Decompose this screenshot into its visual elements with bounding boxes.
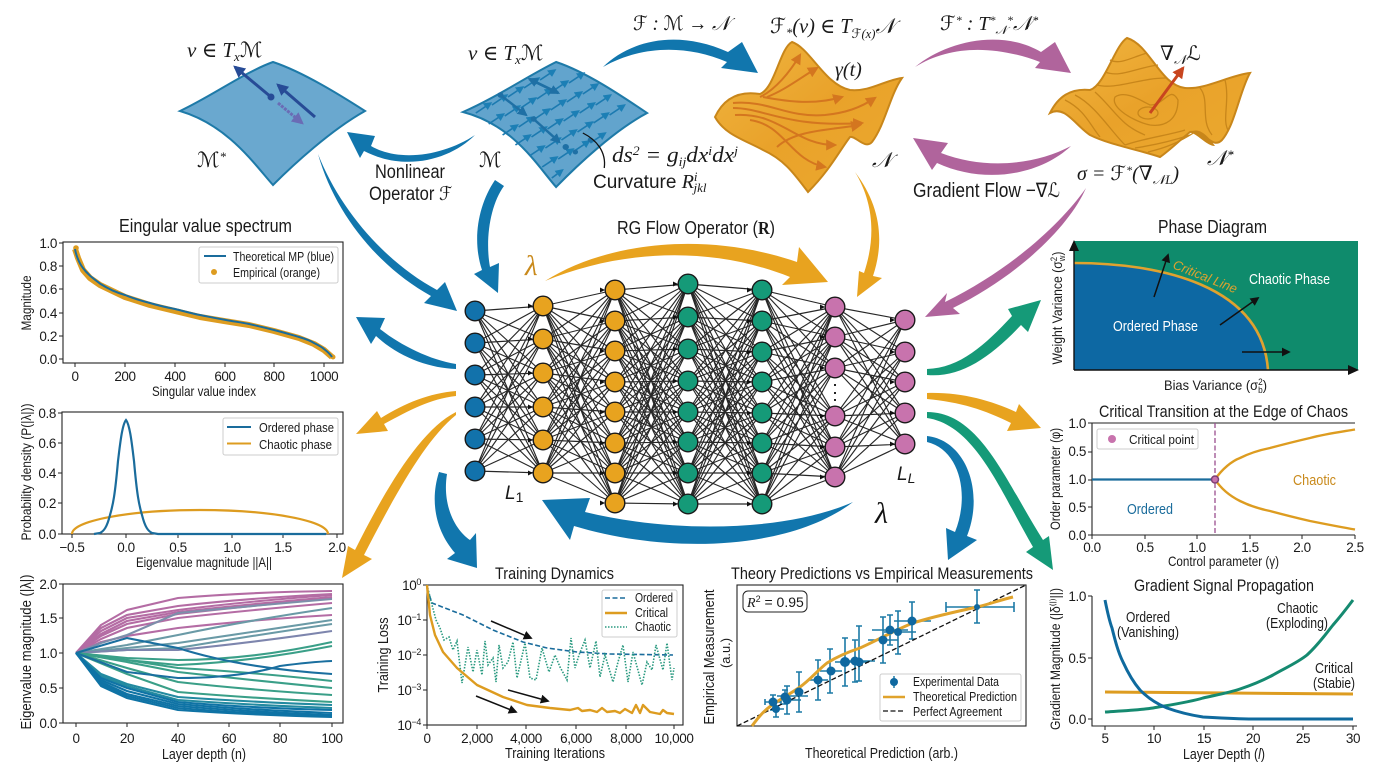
chart: eigenvalue density: 1.0 [223,540,241,555]
ordered curve [1105,600,1353,719]
theoretical series [75,249,332,357]
legend: Ordered [635,591,673,605]
formula: metric: 2 [633,143,640,158]
chart: eigenvalue flow by layer depth: 2.0 [39,577,57,592]
label: F* map: : [962,13,978,35]
label: F* map: * [1007,13,1013,27]
chart: critical transition: 1.0 [1068,416,1086,431]
arrow: M to network [474,180,504,293]
chart: gradient signal propagation: 5 [1101,731,1109,746]
chart: singular value spectrum [18,216,343,399]
annotation: chaotic exploding: Chaotic [1277,600,1318,617]
chart: eigenvalue density: 0.0 [38,527,56,542]
label: L1: L [505,483,516,504]
x axis label: Training Iterations [505,745,605,762]
arrow: RG flow [545,244,828,285]
x axis label: 2 [1258,377,1263,387]
hidden layers gold nodes [533,280,625,513]
arrow: network to spectrum [356,317,456,369]
label: lambda black: λ [874,497,888,530]
label: curvature: i [694,169,698,184]
ordered region [1074,263,1268,370]
chart title: Theory Predictions vs Empirical Measurements [731,564,1033,583]
trend arrows [476,621,548,712]
label: L1: 1 [516,489,524,505]
chart: training dynamics: −3 [412,682,421,692]
y axis label: 2 [1049,257,1059,261]
chaotic branches [1215,430,1355,530]
annotation: critical stable [1313,660,1355,692]
chart: eigenvalue density: 0.5 [169,540,187,555]
title: RG flow operator: RG Flow Operator (R) [617,218,775,238]
R squared badge: R [746,596,756,611]
chaotic region [1074,241,1358,370]
chart: singular value spectrum: 0.8 [39,259,57,274]
label: v in TxM (centre): x [514,52,521,67]
y axis unit: (a.u.) [718,638,733,668]
chart: training dynamics: −1 [412,612,421,622]
chart: training dynamics: −2 [412,647,421,657]
label: F map: ℱ : ℳ → 𝒩 [633,13,735,35]
chart: eigenvalue flow by layer depth: 0.0 [39,716,57,731]
arrow: sigma to network [925,188,1086,317]
legend: Critical point [1129,432,1194,447]
chart title: Phase Diagram [1158,217,1267,237]
y axis label: ) [1049,252,1065,256]
error bars [765,590,1014,717]
x axis label: Eigenvalue magnitude ||A|| [136,554,272,570]
chart: singular value spectrum: 0.0 [39,352,57,367]
label: pushforward: v) ∈ T [799,14,852,38]
annotation: critical stable: Critical [1315,660,1353,677]
label: N: 𝒩 [872,148,898,172]
label: operator F: Operator ℱ [369,184,452,205]
legend [880,674,1021,721]
arrow: network to critical transition [927,393,1041,431]
chart: theory vs empirical [701,564,1033,762]
chart: critical transition: 1.5 [1241,540,1259,555]
ellipsis dots [834,384,836,401]
manifold: N with flow lines [715,42,902,192]
empirical series [75,249,332,357]
label: LL: L [897,464,908,485]
label: M*: ℳ [197,148,219,172]
chart: eigenvalue density: −0.5 [59,540,85,555]
chart: critical transition: 2.5 [1346,540,1364,555]
legend: Ordered phase [259,420,334,435]
legend: Chaotic [635,620,671,634]
chart: eigenvalue flow by layer depth: 100 [321,731,343,746]
label: pushforward: ℱ(x) [852,26,875,41]
chart: singular value spectrum: 0.2 [39,329,57,344]
x axis label: Singular value index [152,383,256,399]
chaotic curve [1105,600,1353,712]
legend: Critical [635,606,668,620]
y axis label: Weight Variance (σ [1049,246,1065,364]
x axis label: Control parameter (γ) [1168,553,1279,569]
arrow: network to eigenvalue chart [342,412,456,578]
chart: eigenvalue flow by layer depth: 40 [171,731,185,746]
chart: eigenvalue density [18,404,346,570]
chart: critical transition: 1.0 [1188,540,1206,555]
legend [223,418,338,455]
chart: gradient signal propagation: 15 [1197,731,1211,746]
chart: eigenvalue density: 1.5 [274,540,292,555]
arrow: N to network [855,172,882,297]
chart: critical transition: 0.5 [1068,500,1086,515]
chart: training dynamics: 0 [416,577,421,587]
geodesic arrows [497,79,593,154]
arrow: network to training dynamics [435,472,477,568]
chart: eigenvalue flow by layer depth: 0.5 [39,681,57,696]
chart: training dynamics: 8,000 [610,731,642,746]
arrow: M to N [603,40,758,73]
chart: singular value spectrum: 200 [114,369,136,384]
x axis label: Theoretical Prediction (arb.) [805,745,958,762]
legend: Empirical (orange) [233,266,320,280]
chart: gradient signal propagation: 20 [1246,731,1260,746]
R squared badge [743,591,807,612]
arrow: network to gradient propagation [927,412,1053,570]
label: v in TxM (left): v ∈ T [187,38,234,62]
phase arrows [1154,255,1289,352]
y axis label: w [1057,255,1067,262]
chart: training dynamics: 2,000 [461,731,493,746]
chart: critical transition: 0.0 [1083,540,1101,555]
arrow: M* to network [318,154,457,311]
formula: metric: dx [686,142,709,167]
label: v in TxM (centre): v ∈ T [468,41,515,65]
chart: singular value spectrum: 0 [71,369,79,384]
chart: critical transition: 0.5 [1068,444,1086,459]
label: LL: L [908,470,915,486]
arrow: N* to N gradient flow [913,138,1071,175]
chart: training dynamics: 4,000 [510,731,542,746]
chart: training dynamics: 10 [402,578,416,593]
chart: eigenvalue flow by layer depth: 0 [72,731,80,746]
label: M: ℳ [479,148,501,172]
chart: gradient signal propagation: 25 [1296,731,1310,746]
chart title: Eingular value spectrum [119,216,292,236]
chart: gradient signal propagation [1047,576,1360,763]
chart: gradient signal propagation: 30 [1346,731,1360,746]
chart: training dynamics: 10 [397,718,412,733]
chart: critical transition [1047,403,1364,569]
label: M*: * [219,149,226,164]
label: ordered phase: Ordered Phase [1113,318,1198,335]
arrow: network to density [356,391,456,434]
label: critical line: Critical Line [1171,257,1240,296]
label: pushforward: ( [792,14,801,38]
y axis label: Gradient Magnitude (|δ⁽ˡ⁾||) [1047,588,1063,730]
input layer L1 nodes [465,301,485,481]
chart: eigenvalue flow by layer depth [18,574,343,763]
neural network [465,274,915,514]
chart: critical transition: 0.0 [1068,528,1086,543]
chart: singular value spectrum: 1.0 [39,236,57,251]
chart: singular value spectrum: 0.6 [39,282,57,297]
chart: gradient signal propagation: 1.0 [1068,589,1086,604]
chart: eigenvalue density: 0.0 [117,540,135,555]
chart: eigenvalue density: 2.0 [328,540,346,555]
y axis label: Probability density (P(|λ|)) [18,404,34,540]
label: N*: * [1227,147,1234,162]
arrow: N to N* [915,40,1071,73]
formula: sigma: * [1126,163,1132,177]
label: N*: 𝒩 [1207,146,1227,170]
chaotic curve [72,510,328,534]
formula: metric: ds [612,142,632,167]
chart: training dynamics: 10 [397,648,412,663]
label: v in TxM (left): x [233,49,240,64]
curvature pointer [583,133,605,168]
formula: sigma: (∇ [1132,163,1153,185]
annotation: critical stable: (Stabie) [1313,675,1355,692]
chart: gradient signal propagation: 10 [1147,731,1161,746]
formula: metric: = [640,142,667,167]
chart: critical transition: 1.0 [1068,472,1086,487]
connection arrowheads [528,282,895,506]
chart: eigenvalue density: 0.6 [38,436,56,451]
chart: singular value spectrum: 400 [164,369,186,384]
chart: training dynamics: 10,000 [655,731,693,746]
chart: eigenvalue flow by layer depth: 60 [222,731,236,746]
legend: Theoretical MP (blue) [233,250,334,264]
chart: gradient signal propagation: 0.0 [1068,712,1086,727]
chart title: Training Dynamics [495,564,614,583]
x axis label: ) [1263,377,1267,393]
ordered line [1092,478,1215,481]
legend [602,590,677,637]
x axis label: Layer Depth (l) [1183,746,1265,763]
label: nabla L: ℒ [1186,43,1201,65]
x axis label: Bias Variance (σ [1164,377,1267,393]
legend: Perfect Agreement [913,705,1002,719]
chart: eigenvalue density: 0.8 [38,406,56,421]
label: F* map: 𝒩 [1013,13,1038,35]
chart: training dynamics: 0 [423,731,431,746]
formula: metric: g [667,142,678,167]
annotation: ordered vanishing: (Vanishing) [1117,624,1179,641]
network connections [475,284,905,504]
label: pushforward: * [786,25,793,40]
formula: sigma: ) [1171,163,1179,185]
label: F* map: ℱ [940,13,956,35]
x axis label: Layer depth (n) [162,746,246,763]
chart: eigenvalue flow by layer depth: 1.5 [39,611,57,626]
chart title: Gradient Signal Propagation [1134,576,1314,595]
label: pushforward: ℱ [770,14,787,38]
chart: training dynamics [375,564,693,762]
y axis label: Eigenvalue magnitude (|λ|) [18,574,35,730]
chart: eigenvalue density: 0.2 [38,496,56,511]
chart: training dynamics: −4 [412,717,421,727]
annotation: ordered vanishing: Ordered [1126,609,1170,626]
legend: Chaotic phase [259,437,332,452]
legend: Experimental Data [913,675,999,689]
manifold: N* with contours [1050,38,1250,157]
label: chaotic: Chaotic [1293,472,1336,489]
chart: training dynamics: 10 [397,613,412,628]
chart: singular value spectrum: 800 [263,369,285,384]
chart: eigenvalue flow by layer depth: 80 [273,731,287,746]
arrow: network to phase diagram [927,300,1041,375]
critical point marker [1212,476,1218,483]
arrow: network to theory plot [927,436,977,560]
label: chaotic phase: Chaotic Phase [1249,271,1330,288]
data points [768,604,980,713]
chart: training dynamics: 6,000 [560,731,592,746]
R squared badge: = 0.95 [761,594,804,610]
label: ordered: Ordered [1127,501,1173,518]
x axis label: b [1258,385,1263,395]
chart: critical transition: 2.0 [1293,540,1311,555]
arrow: feedback lambda [542,498,853,544]
critical series [427,585,674,714]
chart: critical transition: 0.5 [1136,540,1154,555]
label: nonlinear operator: Nonlinear [375,162,446,183]
label: curvature: Curvature R [593,171,694,193]
legend: Theoretical Prediction [913,690,1017,704]
perfect agreement line [737,585,1026,726]
arrow: M to M* [347,132,475,162]
legend [1097,429,1198,449]
label: nabla L: ∇ [1160,43,1174,65]
label: F* map: * [990,13,996,27]
critical line [1074,263,1268,370]
label: gamma(t): γ(t) [835,59,862,81]
chart: singular value spectrum: 600 [214,369,236,384]
formula: sigma: 𝒩L [1153,172,1172,187]
ordered series [427,588,673,655]
chart: singular value spectrum: 0.4 [39,306,58,321]
label: nabla L: 𝒩 [1174,52,1191,67]
formula: metric: i [708,143,713,158]
label: pushforward: 𝒩 [875,14,901,38]
critical dashed line [1214,423,1216,535]
y axis label: Order parameter (φ) [1047,428,1063,530]
label: F* map: * [956,13,962,27]
y axis label: Empirical Measurement [701,589,718,724]
late layers pink nodes [825,297,915,487]
critical curve [1105,692,1353,694]
label: v in TxM (centre): ℳ [521,41,543,65]
chart: eigenvalue flow by layer depth: 20 [120,731,134,746]
axes [1074,244,1355,370]
ordered curve [94,420,326,534]
vector field arrows [476,70,625,178]
formula: sigma: σ = ℱ [1077,163,1126,185]
label: lambda gold: λ [524,250,538,282]
manifold: M with vector field [463,62,647,187]
annotation: ordered vanishing [1117,609,1179,641]
hidden layers green nodes [678,274,772,514]
label: v in TxM (left): ℳ [240,38,262,62]
axis arrowheads [1069,240,1359,375]
label: curvature: jkl [692,180,707,195]
legend [199,247,338,283]
label: F* map: T [978,13,990,35]
formula: metric: ij [679,154,687,169]
chart: singular value spectrum: 1000 [310,369,338,384]
manifold: M* dual sheet [180,62,365,185]
chart: eigenvalue density: 0.4 [38,466,57,481]
formula: metric: dx [712,142,734,167]
annotation: chaotic exploding [1266,600,1328,632]
label: F* map: * [1032,13,1038,27]
chart: phase diagram [1049,217,1359,395]
R squared badge: 2 [756,594,761,604]
annotation: chaotic exploding: (Exploding) [1266,615,1328,632]
theoretical curve [752,597,1013,726]
y axis label: Training Loss [375,618,392,692]
formula: metric: j [732,143,738,158]
chart: eigenvalue flow by layer depth: 1.0 [39,646,57,661]
label: gradient flow: Gradient Flow −∇ℒ [913,180,1060,202]
chart: gradient signal propagation: 0.5 [1068,651,1086,666]
chaotic series [427,585,674,685]
eigenvalue trajectories [76,591,332,717]
y axis label: Magnitude [18,275,34,330]
label: F* map: 𝒩 [996,23,1011,37]
chart: training dynamics: 10 [397,683,412,698]
